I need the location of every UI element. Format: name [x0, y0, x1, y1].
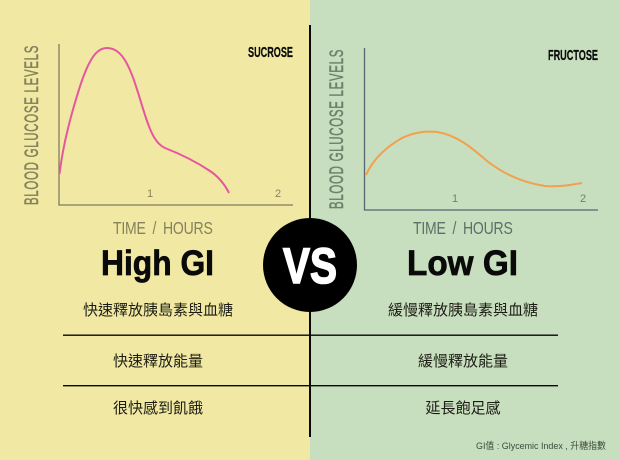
- chart tag: sucrose: SUCROSE: [248, 44, 293, 61]
- tick label: 1 hour: 1: [452, 193, 458, 205]
- chart: sucrose: [22, 44, 293, 238]
- axes: fructose chart: [364, 48, 598, 210]
- point: energy: 緩慢釋放能量: [418, 353, 508, 370]
- row divider: lower: [63, 385, 558, 386]
- curve: sucrose glucose response: [60, 48, 229, 193]
- point: insulin and blood sugar: 緩慢釋放胰島素與血糖: [388, 302, 538, 319]
- tick label: 2 hours: 2: [580, 193, 586, 205]
- tick label: 1 hour: 1: [147, 188, 153, 200]
- heading: High GI: High GI: [101, 244, 214, 283]
- text block: high GI comparison points: [83, 302, 233, 417]
- footnote: GI definition: GI值 : Glycemic Index , 升糖指數: [476, 440, 606, 452]
- row divider: upper: [63, 334, 558, 336]
- panel: low GI background: [310, 0, 620, 460]
- tick label: 2 hours: 2: [275, 188, 281, 200]
- point: hunger: 很快感到飢餓: [113, 399, 203, 417]
- center divider: [309, 25, 311, 437]
- point: satiety: 延長飽足感: [425, 399, 501, 417]
- heading: Low GI: Low GI: [407, 244, 518, 283]
- text block: low GI comparison points: [388, 302, 538, 417]
- panel: high GI background: [0, 0, 310, 460]
- x axis label: fructose chart: TIME / HOURS: [413, 218, 513, 238]
- curve: fructose glucose response: [366, 132, 582, 186]
- axes: sucrose chart: [59, 44, 293, 205]
- chart: fructose: [327, 47, 598, 238]
- y axis label: fructose chart: BLOOD GLUCOSE LEVELS: [327, 48, 348, 209]
- badge: VS: VS: [283, 238, 337, 294]
- point: insulin and blood sugar: 快速釋放胰島素與血糖: [83, 302, 233, 319]
- x axis label: sucrose chart: TIME / HOURS: [113, 218, 213, 238]
- y axis label: sucrose chart: BLOOD GLUCOSE LEVELS: [22, 44, 43, 205]
- badge: VS: [263, 218, 357, 312]
- point: energy: 快速釋放能量: [113, 353, 203, 370]
